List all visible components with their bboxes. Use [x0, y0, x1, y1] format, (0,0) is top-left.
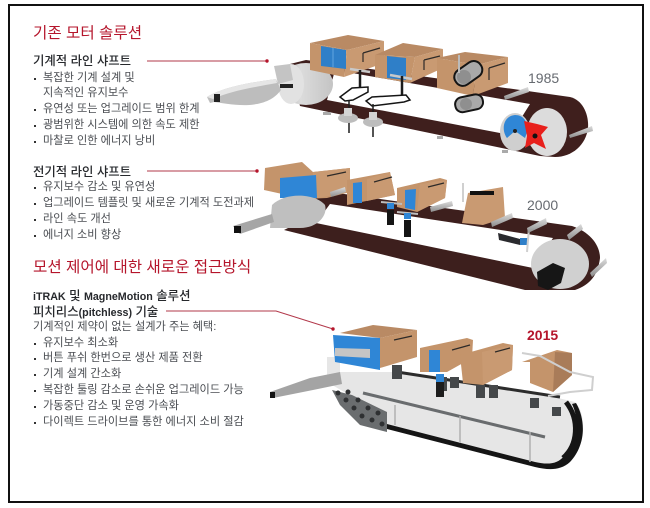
- conveyor 2000: [233, 162, 607, 290]
- end drum with motor: [531, 239, 589, 290]
- block: iTRAK and MagneMotion: iTRAK 및 MagneMotion 솔루션: [33, 289, 190, 303]
- heading: existing motor solutions: 기존 모터 솔루션: [33, 25, 142, 42]
- block: iTRAK and MagneMotion: 유지보수 최소화: [43, 337, 118, 349]
- block: electrical line shaft: 전기적 라인 샤프트: [33, 165, 131, 179]
- linear actuator: [270, 372, 342, 398]
- block: mechanical line shaft: 복잡한 기계 설계 및: [43, 72, 135, 84]
- rail bars: [363, 393, 545, 437]
- servo motors: [381, 183, 529, 252]
- left drum and flange: [207, 63, 333, 105]
- block: iTRAK and MagneMotion: 버튼 푸쉬 한번으로 생산 제품 전환: [43, 352, 203, 364]
- guide rail: [522, 353, 593, 396]
- block: iTRAK and MagneMotion: 기계 설계 간소화: [43, 368, 121, 380]
- block: electrical line shaft: 에너지 소비 향상: [43, 229, 121, 241]
- leader line: mechanical: [147, 59, 269, 63]
- block: iTRAK and MagneMotion: 다이렉트 드라이브를 통한 에너지 소비 절감: [43, 416, 244, 428]
- belt cleats: [323, 87, 593, 153]
- cleats: [330, 187, 607, 277]
- block: iTRAK and MagneMotion: 피치리스(pitchless) 기술: [33, 305, 158, 319]
- blue actuator: [436, 374, 444, 382]
- block: electrical line shaft: 유지보수 감소 및 유연성: [43, 181, 155, 193]
- block: iTRAK and MagneMotion: 가동중단 감소 및 운영 가속화: [43, 400, 179, 412]
- block: electrical line shaft: [33, 165, 254, 241]
- belt 1985: [290, 60, 588, 157]
- block: mechanical line shaft: 지속적인 유지보수: [43, 87, 128, 99]
- belt 2000: [284, 192, 600, 290]
- track body: [327, 357, 583, 467]
- heading: new approach to motion control: 모션 제어에 대한 새로운 접근방식: [33, 259, 251, 276]
- carton row: [264, 162, 505, 225]
- iTRAK system 2015: [270, 325, 593, 469]
- conveyor 1985: [207, 35, 593, 157]
- carton 2 with blue panel: [375, 43, 443, 83]
- mover brackets: [392, 365, 561, 416]
- leader line: pitchless: [166, 311, 335, 331]
- year 2000: 2000: [527, 197, 558, 213]
- block: mechanical line shaft: 유연성 또는 업그레이드 범위 한계: [43, 103, 200, 115]
- left drive head: [233, 196, 326, 234]
- belt drive assemblies: [338, 55, 485, 137]
- block: iTRAK and MagneMotion: [33, 289, 244, 428]
- block: electrical line shaft: 라인 속도 개선: [43, 213, 111, 225]
- magnet array: [332, 390, 387, 432]
- cartons: [333, 325, 572, 392]
- block: iTRAK and MagneMotion: 복잡한 툴링 감소로 손쉬운 업그레이드 가능: [43, 384, 244, 396]
- block: iTRAK and MagneMotion: 기계적인 제약이 없는 설계가 주는 혜택:: [33, 321, 216, 333]
- block: electrical line shaft: 업그레이드 템플릿 및 새로운 기계적 도전과제: [43, 197, 254, 209]
- year 2015: 2015: [527, 327, 558, 343]
- year 1985: 1985: [528, 70, 559, 86]
- block: mechanical line shaft: 마찰로 인한 에너지 낭비: [43, 135, 155, 147]
- carton 1 with blue panel: [310, 35, 384, 77]
- block: mechanical line shaft: [33, 54, 200, 147]
- leader line: electrical: [147, 169, 259, 173]
- drive wheels: [500, 108, 567, 156]
- block: mechanical line shaft: 광범위한 시스템에 의한 속도 제한: [43, 119, 200, 131]
- carton 3: [437, 52, 508, 96]
- block: mechanical line shaft: 기계적 라인 샤프트: [33, 54, 131, 68]
